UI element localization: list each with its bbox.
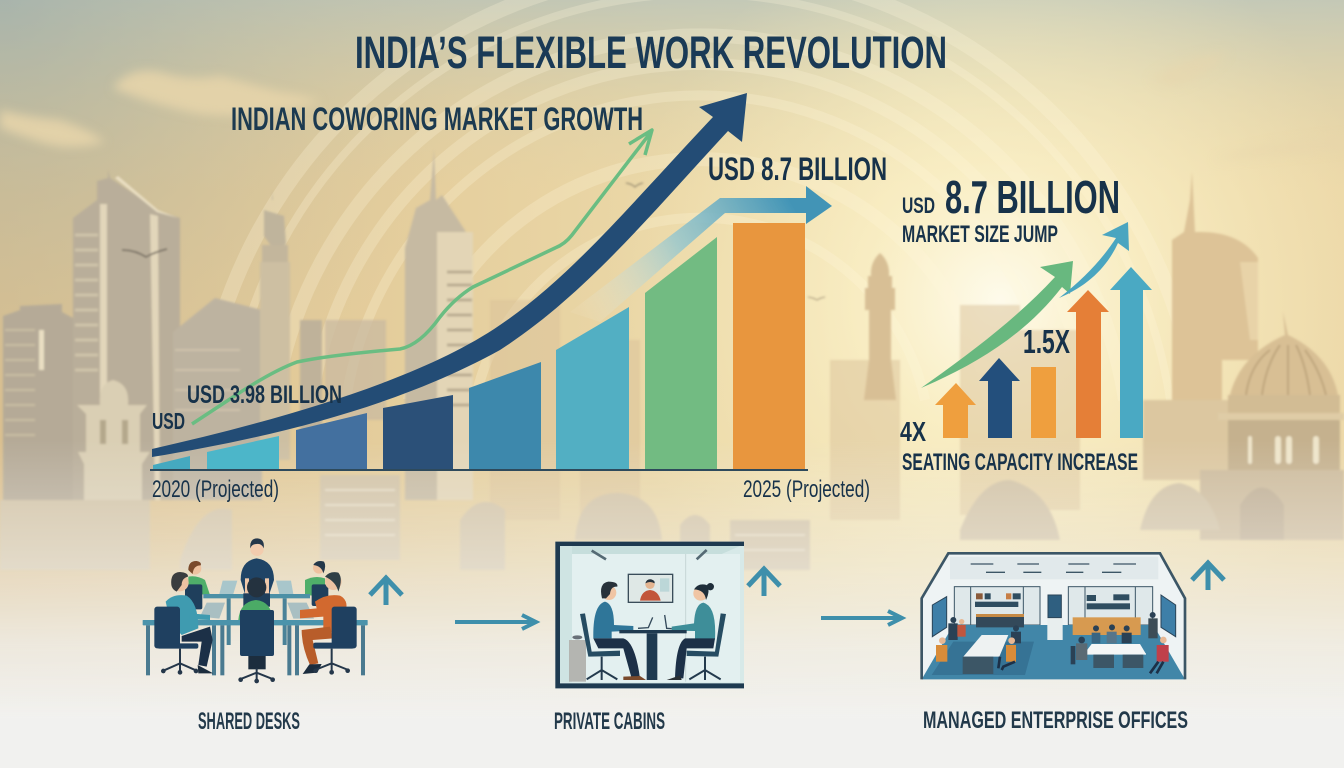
right tower — [1172, 172, 1258, 400]
arrow: private cabins to enterprise offices — [821, 611, 902, 625]
icon: up arrow beside enterprise offices — [1192, 563, 1224, 590]
panel: key statistics — [900, 171, 1152, 476]
bar 8 — [733, 223, 805, 470]
label: shared desks: SHARED DESKS — [198, 708, 300, 735]
icon: green sweep arrow — [921, 261, 1073, 388]
bar 4 — [383, 395, 453, 470]
main dark growth arrow — [152, 93, 747, 457]
stat: 4X: 4X — [900, 416, 926, 447]
green trend line arrow — [192, 130, 652, 424]
left tower — [73, 170, 180, 500]
left pavilion — [77, 380, 150, 530]
arrow: shared desks to private cabins — [455, 615, 536, 629]
bar 5 — [469, 362, 541, 470]
mid block — [173, 298, 262, 500]
illustration: shared desks team — [143, 538, 368, 683]
label: USD 3.98 billion: USD 3.98 BILLION — [187, 381, 342, 409]
icon: up arrow beside private cabins — [748, 569, 780, 596]
stat caption: market size jump: MARKET SIZE JUMP — [902, 221, 1058, 248]
bar chart: market growth 2020 to 2025 — [150, 186, 832, 471]
bar 7 — [645, 237, 717, 470]
spire tower — [405, 150, 473, 500]
label: USD: USD — [152, 408, 185, 434]
glass block — [300, 320, 322, 440]
chart heading: INDIAN COWORING MARKET GROWTH — [231, 101, 643, 137]
bar 6 — [556, 307, 629, 470]
spiral tower — [260, 262, 290, 460]
panel: managed enterprise offices — [922, 553, 1188, 734]
bar 3 — [296, 413, 367, 470]
icon: orange up arrow — [935, 383, 976, 438]
birds — [122, 249, 167, 257]
icon: up arrow beside shared desks — [370, 578, 402, 605]
panel: shared desks — [143, 538, 368, 735]
icon: navy up arrow — [979, 358, 1020, 438]
far faded city — [490, 300, 1080, 520]
stat caption: seating capacity: SEATING CAPACITY INCREASE — [902, 449, 1138, 476]
icon: teal sweep arrow — [1059, 222, 1129, 298]
label: managed enterprise offices: MANAGED ENTERPRISE OFFICES — [923, 707, 1188, 734]
label: USD 8.7 billion on chart: USD 8.7 BILLION — [708, 151, 887, 187]
minaret — [864, 253, 896, 400]
low foreground domes and facades — [0, 475, 1220, 570]
stat: USD prefix: USD — [902, 193, 935, 218]
icon: teal up arrow — [1110, 267, 1152, 438]
illustration: enterprise office floor — [922, 553, 1185, 679]
panel: private cabins — [554, 542, 744, 735]
stat: 8.7 billion: 8.7 BILLION — [945, 171, 1120, 223]
small left block — [3, 304, 73, 520]
label: private cabins: PRIVATE CABINS — [554, 708, 665, 735]
axis label 2025: 2025 (Projected) — [743, 476, 870, 503]
bar 1 — [153, 456, 190, 470]
icon: orange bar — [1031, 367, 1056, 438]
right dome palace — [1200, 312, 1344, 540]
bar 2 — [207, 436, 279, 470]
light trend arrow behind the bars — [570, 186, 832, 322]
illustration: private cabin meeting — [555, 542, 744, 688]
stat: 1.5X: 1.5X — [1023, 323, 1070, 360]
baseline axis — [150, 469, 808, 471]
title: INDIA’S FLEXIBLE WORK REVOLUTION — [355, 27, 947, 78]
axis label 2020: 2020 (Projected) — [152, 476, 279, 503]
icon: dark orange up arrow — [1067, 290, 1109, 438]
